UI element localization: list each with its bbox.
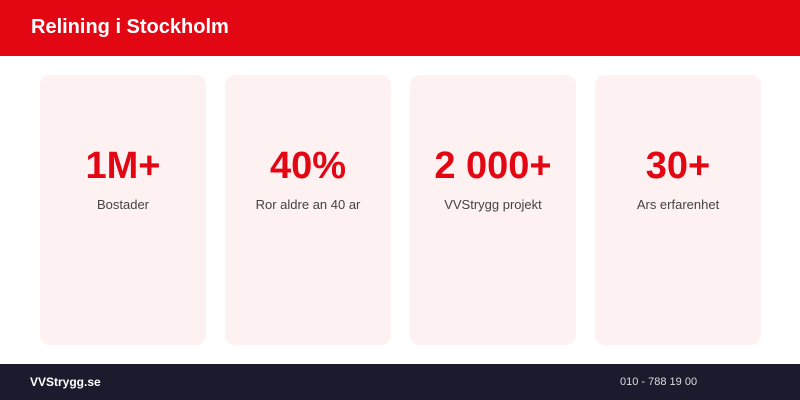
card: bostader bbox=[40, 75, 206, 345]
stat label: Bostader bbox=[97, 197, 149, 212]
stat number: 30+ bbox=[646, 145, 710, 187]
title: Relining i Stockholm bbox=[31, 16, 229, 38]
stat label: VVStrygg projekt bbox=[444, 197, 542, 212]
header bbox=[0, 0, 800, 56]
card: projekt bbox=[410, 75, 576, 345]
stat label: Ars erfarenhet bbox=[637, 197, 719, 212]
stat label: Ror aldre an 40 ar bbox=[256, 197, 360, 212]
card: ror bbox=[225, 75, 391, 345]
footer phone: 010 - 788 19 00 bbox=[620, 376, 697, 388]
stat number: 1M+ bbox=[86, 145, 160, 187]
stat number: 40% bbox=[270, 145, 346, 187]
footer bbox=[0, 364, 800, 400]
card: erfarenhet bbox=[595, 75, 761, 345]
stat number: 2 000+ bbox=[434, 145, 552, 187]
footer brand: VVStrygg.se bbox=[30, 375, 101, 389]
